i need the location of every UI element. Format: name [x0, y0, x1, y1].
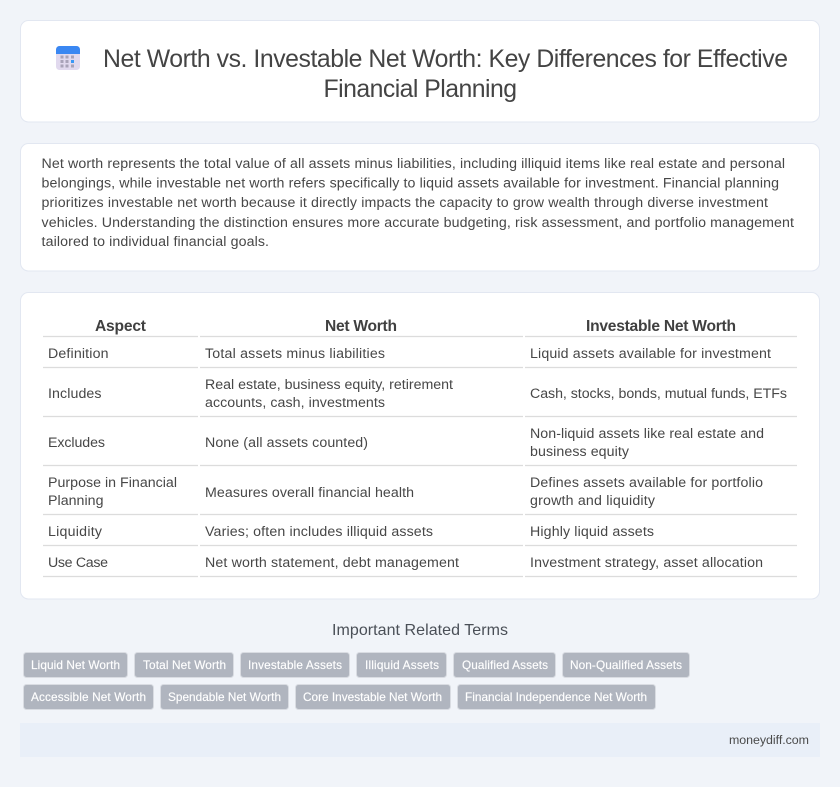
row: purpose in financial planning: [48, 475, 763, 509]
tag: total net worth: [134, 652, 234, 678]
tag: spendable net worth: [160, 684, 288, 710]
table headers: Net Worth: [325, 318, 397, 335]
row: excludes: None (all assets counted): [205, 435, 368, 451]
panel: summary text: [20, 144, 820, 271]
title: [103, 46, 788, 103]
row: purpose in financial planning: Purpose in Financial: [48, 475, 177, 491]
row: use case: Net worth statement, debt management: [205, 555, 459, 571]
heading: important related terms: Important Related Terms: [332, 622, 508, 639]
summary paragraph: tailored to individual financial goals.: [42, 234, 269, 250]
summary paragraph: belongings, while investable net worth refers specifically to liquid assets available for investment. Financial planning: [42, 176, 779, 192]
title: Net Worth vs. Investable Net Worth: Key Differences for Effective: [103, 46, 788, 73]
row: liquidity: Highly liquid assets: [530, 524, 654, 540]
summary paragraph: prioritizes investable net worth because it directly impacts the capacity to grow wealth through diverse investment: [42, 195, 768, 211]
table headers: Aspect: [95, 318, 146, 335]
tag: liquid net worth: [24, 652, 128, 678]
row: definition: Definition: [48, 346, 108, 362]
tag: non-qualified assets: [562, 652, 690, 678]
title: Financial Planning: [324, 76, 517, 103]
row: definition: [48, 346, 771, 362]
summary paragraph: [42, 156, 794, 250]
table headers: Investable Net Worth: [586, 318, 736, 335]
footer: [20, 723, 820, 757]
row: includes: Cash, stocks, bonds, mutual funds, ETFs: [530, 386, 787, 402]
tag: liquid net worth: Liquid Net Worth: [31, 658, 120, 672]
tag: investable assets: [240, 652, 350, 678]
row: definition: Liquid assets available for investment: [530, 346, 771, 362]
tag: core investable net worth: Core Investable Net Worth: [303, 690, 442, 704]
row: liquidity: [48, 524, 654, 540]
table row rules: [43, 336, 797, 576]
tag: qualified assets: [454, 652, 556, 678]
summary paragraph: vehicles. Understanding the distinction ensures more accurate budgeting, risk assessment, and portfolio management: [42, 215, 794, 231]
row: includes: accounts, cash, investments: [205, 395, 385, 411]
panel: related term tags: [24, 652, 690, 710]
row: purpose in financial planning: Measures overall financial health: [205, 485, 414, 501]
tag: core investable net worth: [296, 684, 450, 710]
tag: investable assets: Investable Assets: [248, 658, 342, 672]
tag: accessible net worth: [24, 684, 154, 710]
row: excludes: business equity: [530, 444, 630, 460]
row: includes: Includes: [48, 386, 102, 402]
panel: header: [20, 20, 820, 122]
tag: illiquid assets: [356, 652, 446, 678]
row: liquidity: Liquidity: [48, 524, 103, 540]
row: use case: Investment strategy, asset allocation: [530, 555, 763, 571]
row: excludes: [48, 426, 764, 460]
row: liquidity: Varies; often includes illiquid assets: [205, 524, 433, 540]
summary paragraph: Net worth represents the total value of all assets minus liabilities, including illiquid items like real estate and personal: [42, 156, 785, 172]
row: use case: [48, 555, 763, 571]
tag: spendable net worth: Spendable Net Worth: [168, 690, 281, 704]
row: excludes: Excludes: [48, 435, 105, 451]
tag: accessible net worth: Accessible Net Worth: [31, 690, 146, 704]
row: includes: [48, 377, 787, 411]
row: definition: Total assets minus liabilities: [205, 346, 385, 362]
tag: financial independence net worth: Financial Independence Net Worth: [465, 690, 647, 704]
panel: comparison table: [20, 292, 820, 599]
footer source text: moneydiff.com: [729, 733, 809, 747]
tag: non-qualified assets: Non-Qualified Assets: [570, 658, 682, 672]
tag: total net worth: Total Net Worth: [143, 658, 226, 672]
tag: illiquid assets: Illiquid Assets: [365, 658, 439, 672]
row: purpose in financial planning: Defines assets available for portfolio: [530, 475, 763, 491]
row: use case: Use Case: [48, 555, 108, 571]
tag: financial independence net worth: [458, 684, 656, 710]
row: excludes: Non-liquid assets like real estate and: [530, 426, 764, 442]
row: purpose in financial planning: growth and liquidity: [530, 493, 656, 509]
tag: qualified assets: Qualified Assets: [462, 658, 548, 672]
row: includes: Real estate, business equity, retirement: [205, 377, 453, 393]
row: purpose in financial planning: Planning: [48, 493, 104, 509]
table headers: [95, 318, 736, 335]
icon: calendar: [56, 46, 80, 70]
